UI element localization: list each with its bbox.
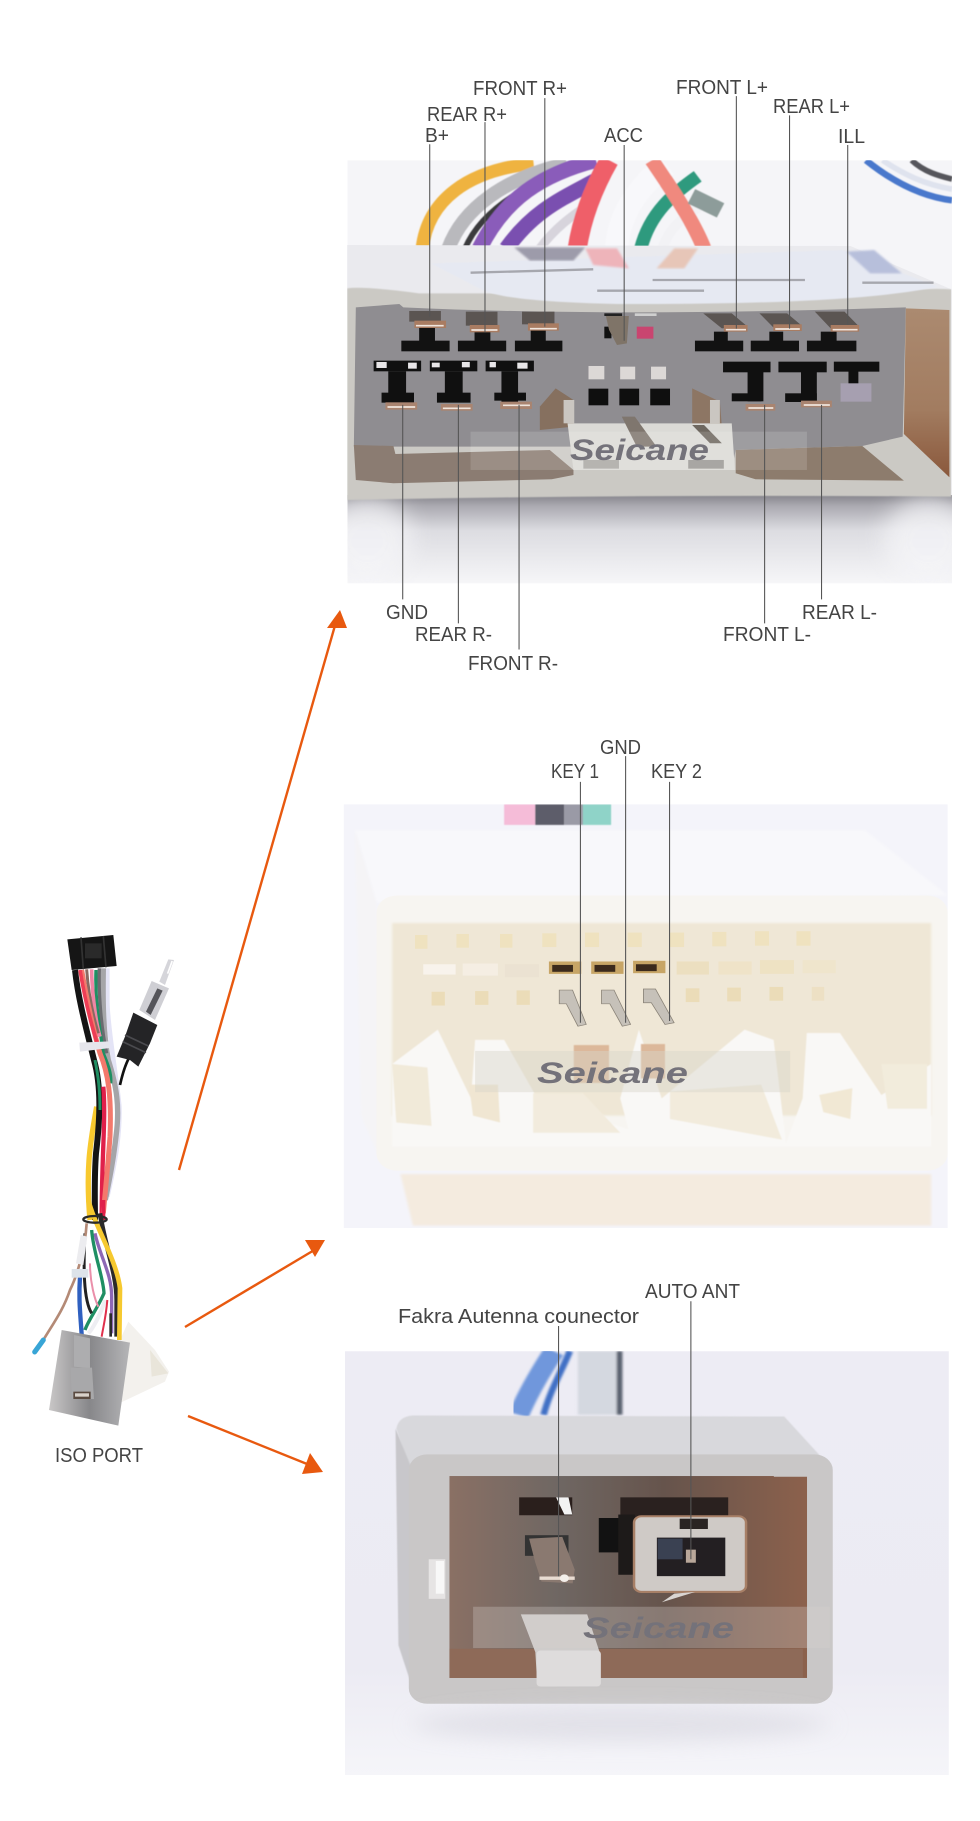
leader lines: antenna connector — [559, 1301, 691, 1576]
harness upper half — [67, 935, 174, 1220]
watermark band — [475, 1051, 790, 1092]
labels: main connector: ILL — [838, 126, 865, 148]
photo: grey antenna connector — [345, 1351, 949, 1775]
watermark: white connector: Seicane — [537, 1057, 688, 1090]
grey ISO block — [49, 1330, 130, 1426]
connector top face — [347, 245, 950, 293]
labels: main connector: FRONT L- — [723, 624, 811, 646]
cable tie — [79, 1041, 110, 1052]
labels: main connector: B+ — [425, 125, 449, 147]
connector top — [396, 1415, 830, 1466]
labels: main connector: FRONT L+ — [676, 77, 768, 99]
labels: main connector: REAR L- — [802, 602, 877, 624]
connector rim — [347, 288, 951, 500]
leader lines: main connector — [403, 96, 848, 649]
wires: antenna connector — [519, 1351, 620, 1415]
labels: white connector: KEY 1 — [551, 761, 599, 783]
arrow: to white connector — [185, 1240, 325, 1327]
connector interior — [449, 1476, 807, 1678]
top row terminals — [401, 327, 856, 351]
labels: main connector: ACC — [604, 125, 643, 147]
connector interior — [354, 304, 906, 470]
connector body — [347, 245, 951, 500]
wires: white connector — [504, 804, 611, 825]
labels: main connector: FRONT R- — [468, 653, 558, 675]
middle slots — [423, 960, 836, 977]
latch — [521, 1614, 601, 1687]
labels: main connector: REAR R- — [415, 624, 492, 646]
connector top — [355, 830, 948, 902]
photo: white connector with key pins — [344, 804, 948, 1228]
upper wires — [75, 968, 129, 1220]
labels: main connector: REAR L+ — [773, 96, 850, 118]
wires: main connector bundle — [422, 160, 952, 248]
harness lower half — [35, 1200, 169, 1426]
base shadow — [400, 1174, 931, 1226]
labels: white connector — [551, 737, 702, 783]
lower slots and pins — [432, 987, 824, 1026]
photo: main connector with 13 pins — [322, 160, 974, 585]
labels: antenna connector: AUTO ANT — [645, 1281, 740, 1303]
watermark band — [471, 432, 807, 470]
ribs: white lower teeth — [392, 1030, 931, 1147]
labels: main connector: REAR R+ — [427, 104, 507, 126]
labels: white connector: KEY 2 — [651, 761, 702, 783]
white connector behind — [120, 1322, 169, 1403]
arrow: to antenna connector — [188, 1416, 323, 1474]
upper slots — [415, 931, 811, 949]
antenna plug — [117, 959, 174, 1067]
arrow: to main connector — [179, 610, 347, 1170]
lower shadow — [348, 495, 952, 564]
label: ISO PORT: ISO PORT — [55, 1445, 143, 1467]
clip notch — [429, 1559, 445, 1599]
shadow — [433, 1709, 808, 1742]
labels: main connector: FRONT R+ — [473, 78, 567, 100]
photo: wiring harness — [35, 935, 174, 1426]
lower wires — [35, 1200, 120, 1352]
watermark: antenna connector: Seicane — [583, 1612, 734, 1645]
upper left slot — [519, 1497, 572, 1515]
bottom row terminals — [374, 361, 879, 403]
connector front — [376, 895, 948, 1171]
labels: antenna connector — [398, 1281, 740, 1328]
labels: main connector: GND — [386, 602, 428, 624]
Fakra socket — [599, 1497, 746, 1602]
connector rim — [409, 1454, 833, 1704]
labels: white connector: GND — [600, 737, 641, 759]
cable ties — [83, 1216, 107, 1223]
watermark: main connector: Seicane — [570, 434, 709, 467]
leader lines: white connector — [580, 756, 670, 1023]
centre terminal and squares — [588, 313, 670, 405]
labels: antenna connector: Fakra Autenna counector — [398, 1306, 639, 1328]
lower left terminal — [525, 1535, 575, 1583]
printed sticker — [431, 247, 938, 304]
watermark band — [473, 1607, 830, 1648]
centre latch — [540, 388, 735, 470]
labels: main connector — [386, 77, 877, 675]
black header — [67, 935, 117, 970]
